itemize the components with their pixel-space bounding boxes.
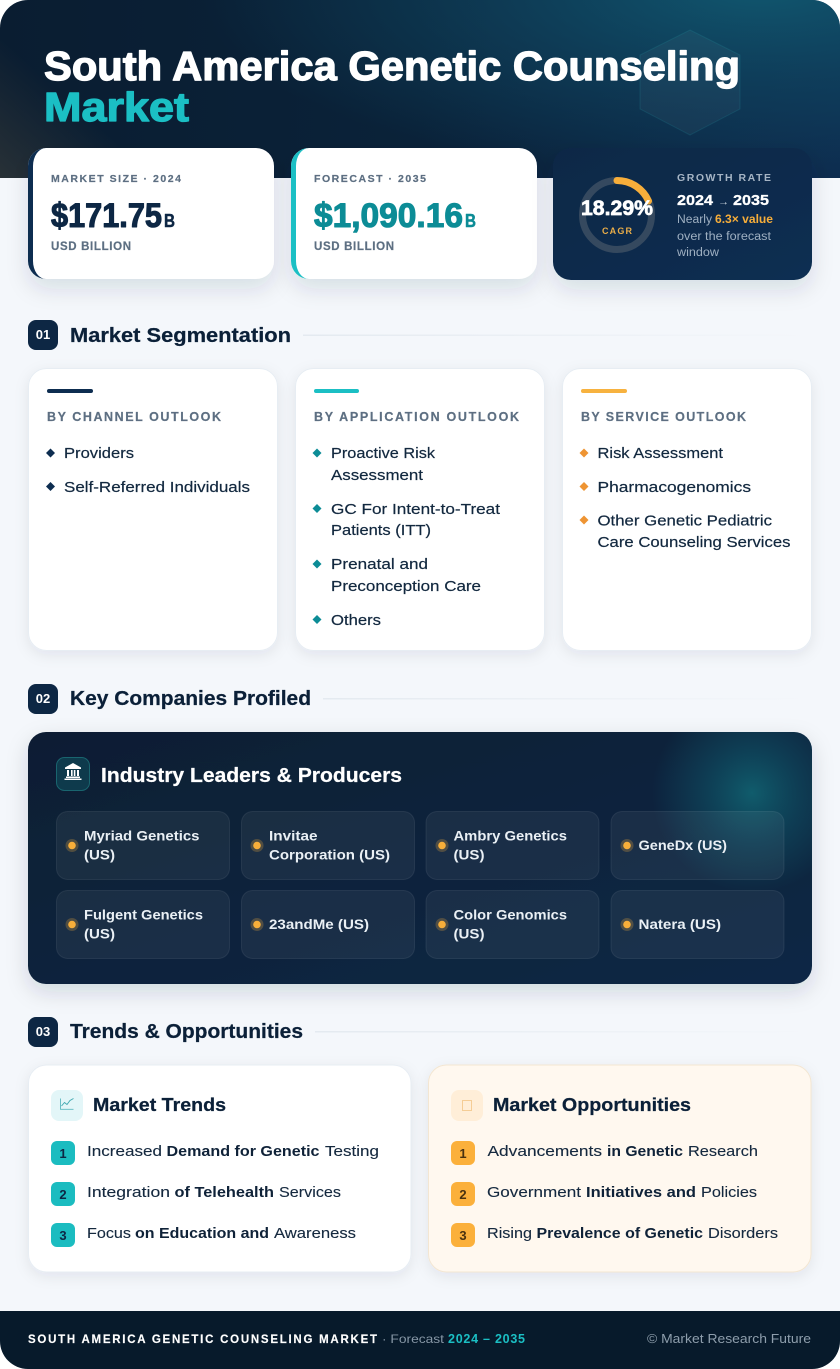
icon: missing glyph box bbox=[451, 1090, 483, 1121]
trend 1: Demand for Genetic bbox=[166, 1143, 320, 1160]
trend 3: 3 bbox=[59, 1228, 67, 1243]
trend 1: 1 bbox=[59, 1146, 67, 1161]
stat card: forecast: B bbox=[465, 211, 476, 231]
chip: Color Genomics: Color Genomics bbox=[454, 906, 567, 922]
panel: channel outlook bbox=[28, 368, 278, 650]
opportunity 1: Research bbox=[688, 1143, 758, 1160]
chip: Fulgent Genetics bbox=[56, 890, 230, 958]
footer: SOUTH AMERICA GENETIC COUNSELING MARKET bbox=[28, 1334, 377, 1346]
hexagon decoration bbox=[640, 30, 740, 135]
opportunity 1 bbox=[451, 1141, 758, 1165]
section heading 01: 01 bbox=[36, 327, 50, 342]
panel: service outlook: Other Genetic Pediatric bbox=[598, 512, 773, 530]
stat card: market size: $171.75 bbox=[51, 197, 162, 235]
panel: application outlook: BY APPLICATION OUTLOOK bbox=[314, 410, 519, 424]
panel: channel outlook: BY CHANNEL OUTLOOK bbox=[47, 410, 221, 424]
panel: channel outlook: Providers bbox=[64, 445, 134, 462]
growth rate text: 2024 bbox=[677, 192, 714, 209]
panel: application outlook: GC For Intent-to-Treat bbox=[331, 501, 501, 518]
stat card: market size: B bbox=[164, 211, 175, 231]
footer: · Forecast bbox=[382, 1332, 445, 1346]
panel: service outlook bbox=[562, 368, 812, 650]
trend 2: Integration bbox=[87, 1184, 170, 1201]
growth rate text: window bbox=[676, 247, 720, 259]
growth rate text: Nearly bbox=[677, 214, 712, 226]
chip: Ambry Genetics: (US) bbox=[454, 846, 484, 862]
panel: service outlook: Pharmacogenomics bbox=[598, 479, 751, 496]
opportunity 3 bbox=[451, 1223, 778, 1247]
chip: Invitae: Corporation (US) bbox=[269, 846, 390, 862]
trend 3: on Education and bbox=[135, 1225, 269, 1242]
chip: 23andMe: 23andMe (US) bbox=[269, 916, 369, 932]
chip: Invitae bbox=[242, 812, 414, 880]
opportunity 3: Disorders bbox=[708, 1225, 778, 1242]
footer: 2024 – 2035 bbox=[448, 1332, 525, 1346]
chip: Ambry Genetics: Ambry Genetics bbox=[454, 828, 567, 844]
stat card: forecast: $1,090.16 bbox=[314, 197, 463, 235]
chip: Ambry Genetics bbox=[426, 812, 599, 880]
stat card: growth rate bbox=[553, 148, 812, 280]
icon: bank bbox=[56, 758, 90, 790]
section heading 02: Key Companies Profiled bbox=[70, 688, 311, 710]
opportunity 2: Initiatives and bbox=[586, 1184, 696, 1201]
panel: market trends: Market Trends bbox=[93, 1095, 226, 1115]
section heading 01 bbox=[28, 320, 554, 350]
stat card: market size: MARKET SIZE · 2024 bbox=[51, 173, 181, 185]
growth rate text: over the forecast bbox=[677, 231, 772, 243]
trend 2: 2 bbox=[59, 1187, 67, 1202]
opportunity 3: Prevalence of Genetic bbox=[536, 1225, 703, 1242]
chip: Fulgent Genetics: Fulgent Genetics bbox=[84, 906, 203, 922]
chip: Natera: Natera (US) bbox=[638, 916, 721, 932]
opportunity 1: in Genetic bbox=[607, 1143, 683, 1160]
section heading 03: Trends & Opportunities bbox=[70, 1021, 303, 1043]
opportunity 3: Rising bbox=[487, 1225, 532, 1242]
opportunity 3: 3 bbox=[459, 1228, 467, 1243]
chip: Color Genomics bbox=[426, 890, 599, 958]
trend 3: Focus bbox=[87, 1225, 131, 1242]
chip: Natera bbox=[611, 890, 784, 958]
title: Market bbox=[44, 84, 189, 130]
opportunity 2 bbox=[451, 1182, 757, 1206]
trend 1: Increased bbox=[87, 1143, 162, 1160]
chip: 23andMe bbox=[242, 890, 414, 958]
chip: GeneDx bbox=[611, 812, 784, 880]
trend 3: Awareness bbox=[274, 1225, 356, 1242]
growth rate text bbox=[676, 172, 773, 259]
chip: Color Genomics: (US) bbox=[454, 926, 484, 942]
stat card: forecast: USD BILLION bbox=[314, 241, 394, 253]
opportunity 1: Advancements bbox=[488, 1143, 602, 1160]
panel: application outlook bbox=[296, 368, 544, 650]
panel: market opportunities: Market Opportunities bbox=[493, 1095, 691, 1115]
opportunity 2: Policies bbox=[701, 1184, 757, 1201]
chip: Myriad Genetics bbox=[56, 812, 230, 880]
panel: application outlook: Preconception Care bbox=[331, 578, 481, 595]
section heading 01: Market Segmentation bbox=[70, 325, 291, 347]
growth rate text: → bbox=[718, 197, 729, 208]
chip: Myriad Genetics: Myriad Genetics bbox=[84, 828, 200, 844]
trend 2: Services bbox=[279, 1184, 341, 1201]
opportunity 1: 1 bbox=[459, 1146, 467, 1161]
header band bbox=[0, 0, 840, 178]
panel: application outlook: Others bbox=[331, 612, 381, 629]
stat card: forecast bbox=[291, 148, 537, 279]
CAGR ring: 18.29% bbox=[581, 196, 653, 220]
growth rate text: 6.3× value bbox=[715, 214, 773, 226]
panel: application outlook: Prenatal and bbox=[331, 556, 428, 573]
trend 1: Testing bbox=[325, 1143, 379, 1160]
title bbox=[44, 50, 738, 122]
icon: line chart bbox=[51, 1090, 83, 1121]
panel: service outlook: Risk Assessment bbox=[598, 445, 724, 462]
opportunity 2: 2 bbox=[459, 1187, 467, 1202]
chip: Invitae: Invitae bbox=[269, 828, 318, 844]
growth rate text: GROWTH RATE bbox=[677, 172, 771, 184]
opportunity 2: Government bbox=[487, 1184, 582, 1201]
panel: channel outlook: Self-Referred Individuals bbox=[64, 479, 250, 496]
CAGR ring bbox=[581, 180, 653, 250]
section heading 03 bbox=[28, 1017, 562, 1047]
panel: service outlook: BY SERVICE OUTLOOK bbox=[581, 410, 746, 424]
panel: industry leaders bbox=[28, 732, 812, 984]
panel: application outlook: Patients (ITT) bbox=[331, 522, 431, 539]
stat card: market size: USD BILLION bbox=[51, 241, 131, 253]
CAGR ring: CAGR bbox=[602, 226, 632, 236]
trend 1 bbox=[51, 1141, 379, 1165]
chip: Fulgent Genetics: (US) bbox=[84, 926, 115, 942]
section heading 02: 02 bbox=[36, 691, 50, 706]
growth rate text: 2035 bbox=[733, 192, 769, 209]
panel: application outlook: Proactive Risk bbox=[331, 445, 436, 462]
footer bbox=[0, 1311, 840, 1369]
stat card: market size bbox=[28, 148, 274, 279]
panel: market trends bbox=[28, 1065, 411, 1272]
footer: © Market Research Future bbox=[647, 1332, 811, 1346]
chip: GeneDx: GeneDx (US) bbox=[638, 837, 727, 853]
stat card: forecast: FORECAST · 2035 bbox=[314, 173, 426, 185]
panel: industry leaders: Industry Leaders & Producers bbox=[101, 765, 402, 787]
panel: market opportunities bbox=[428, 1065, 811, 1272]
section heading 03: 03 bbox=[36, 1024, 50, 1039]
trend 3 bbox=[51, 1223, 356, 1247]
trend 2: of Telehealth bbox=[174, 1184, 274, 1201]
title: South America Genetic Counseling bbox=[44, 43, 740, 89]
panel: service outlook: Care Counseling Services bbox=[598, 534, 790, 551]
section heading 02 bbox=[28, 684, 566, 714]
trend 2 bbox=[51, 1182, 341, 1206]
panel: application outlook: Assessment bbox=[331, 467, 424, 484]
chip: Myriad Genetics: (US) bbox=[84, 846, 115, 862]
